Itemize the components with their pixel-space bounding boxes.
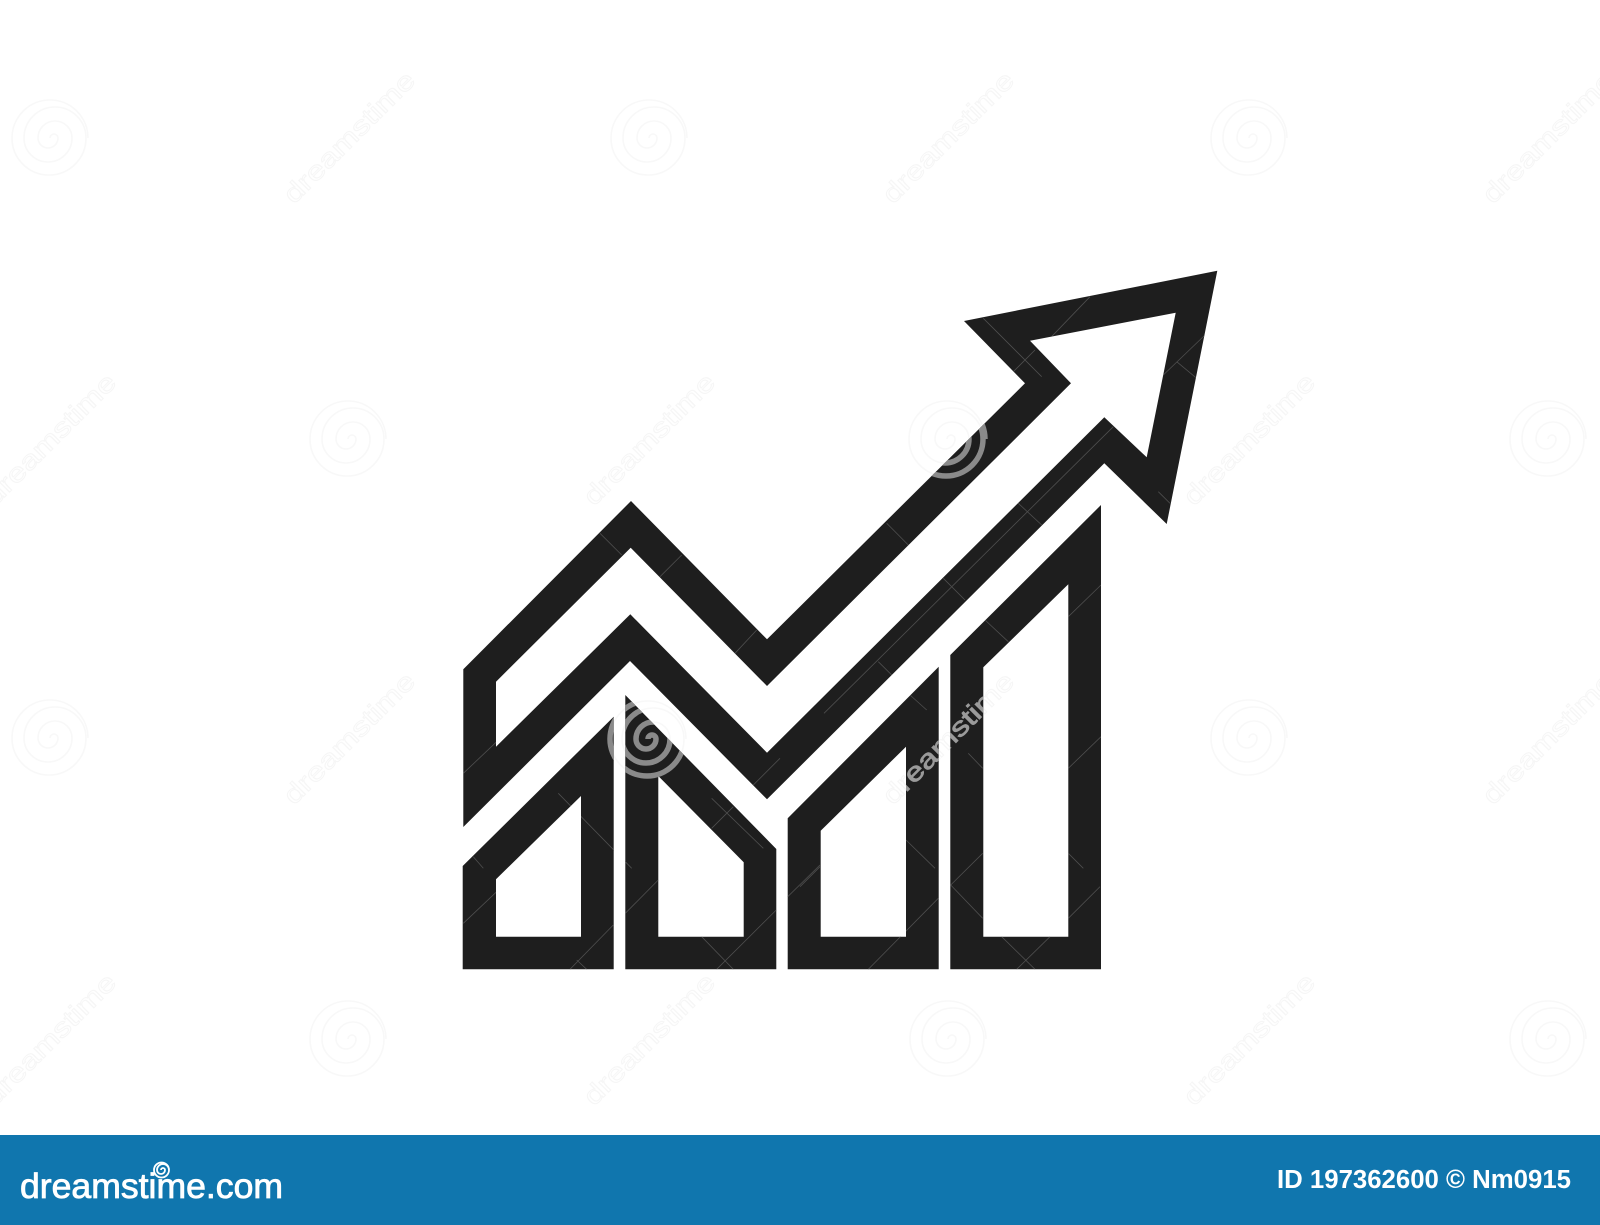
bar 2 <box>625 695 776 969</box>
watermark: spirals and diagonal wordmarks: dreamstime <box>876 65 1020 209</box>
bar 4 <box>950 505 1101 969</box>
footer banner <box>0 1135 1600 1225</box>
icon: rising bar chart with arrow <box>463 271 1217 969</box>
watermark: spirals and diagonal wordmarks: dreamstime <box>1476 65 1600 209</box>
watermark: spirals and diagonal wordmarks: dreamstime <box>577 367 721 511</box>
bar 3 <box>788 667 939 969</box>
watermark: spirals and diagonal wordmarks: dreamstime <box>876 666 1020 810</box>
image id and credit: ID 197362600 © Nm0915 <box>1277 1166 1571 1194</box>
watermark: spirals and diagonal wordmarks: dreamstime <box>1476 666 1600 810</box>
watermark: spirals and diagonal wordmarks: dreamstime <box>277 666 421 810</box>
watermark: spirals and diagonal wordmarks: dreamstime <box>1177 367 1321 511</box>
bar 1 <box>463 717 614 969</box>
brand logo: dreamstime.com <box>20 1167 283 1206</box>
watermark: spirals and diagonal wordmarks: dreamstime <box>1177 967 1321 1111</box>
watermark: spirals and diagonal wordmarks: dreamstime <box>277 65 421 209</box>
icon: zigzag growth arrow <box>463 271 1217 827</box>
watermark overlay on icon: dreamstime <box>876 666 1020 810</box>
watermark: spirals and diagonal wordmarks: dreamstime <box>577 967 721 1111</box>
watermark overlay on icon <box>463 297 1205 969</box>
